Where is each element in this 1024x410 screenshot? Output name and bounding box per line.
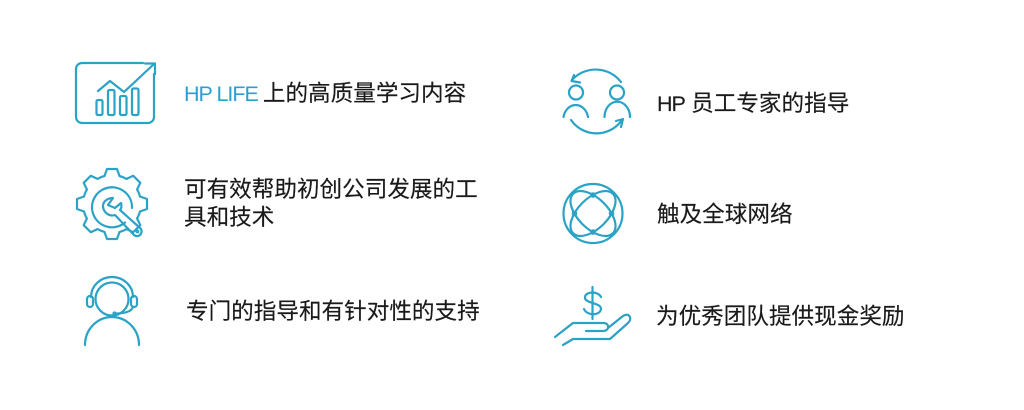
text: dedicated guidance: 专门的指导和有针对性的支持 <box>186 299 480 324</box>
text: global network: 触及全球网络 <box>657 202 793 227</box>
icon: hand with dollar <box>555 287 630 345</box>
text: cash prizes: 为优秀团队提供现金奖励 <box>656 304 905 329</box>
text: HP LIFE content: HP LIFE上的高质量学习内容 <box>184 81 466 106</box>
icon: gear and wrench <box>77 169 147 239</box>
icon: growth chart <box>76 63 155 123</box>
icon: two people exchange <box>564 70 630 133</box>
icon: global network <box>563 183 623 244</box>
text: tools and technology <box>184 177 478 230</box>
icon: headset support person <box>85 277 139 345</box>
text: tools and technology: 具和技术 <box>184 205 274 230</box>
text: HP staff mentoring: HP 员工专家的指导 <box>657 91 849 116</box>
icon: network nodes <box>572 192 614 235</box>
text: tools and technology: 可有效帮助初创公司发展的工 <box>184 177 478 202</box>
